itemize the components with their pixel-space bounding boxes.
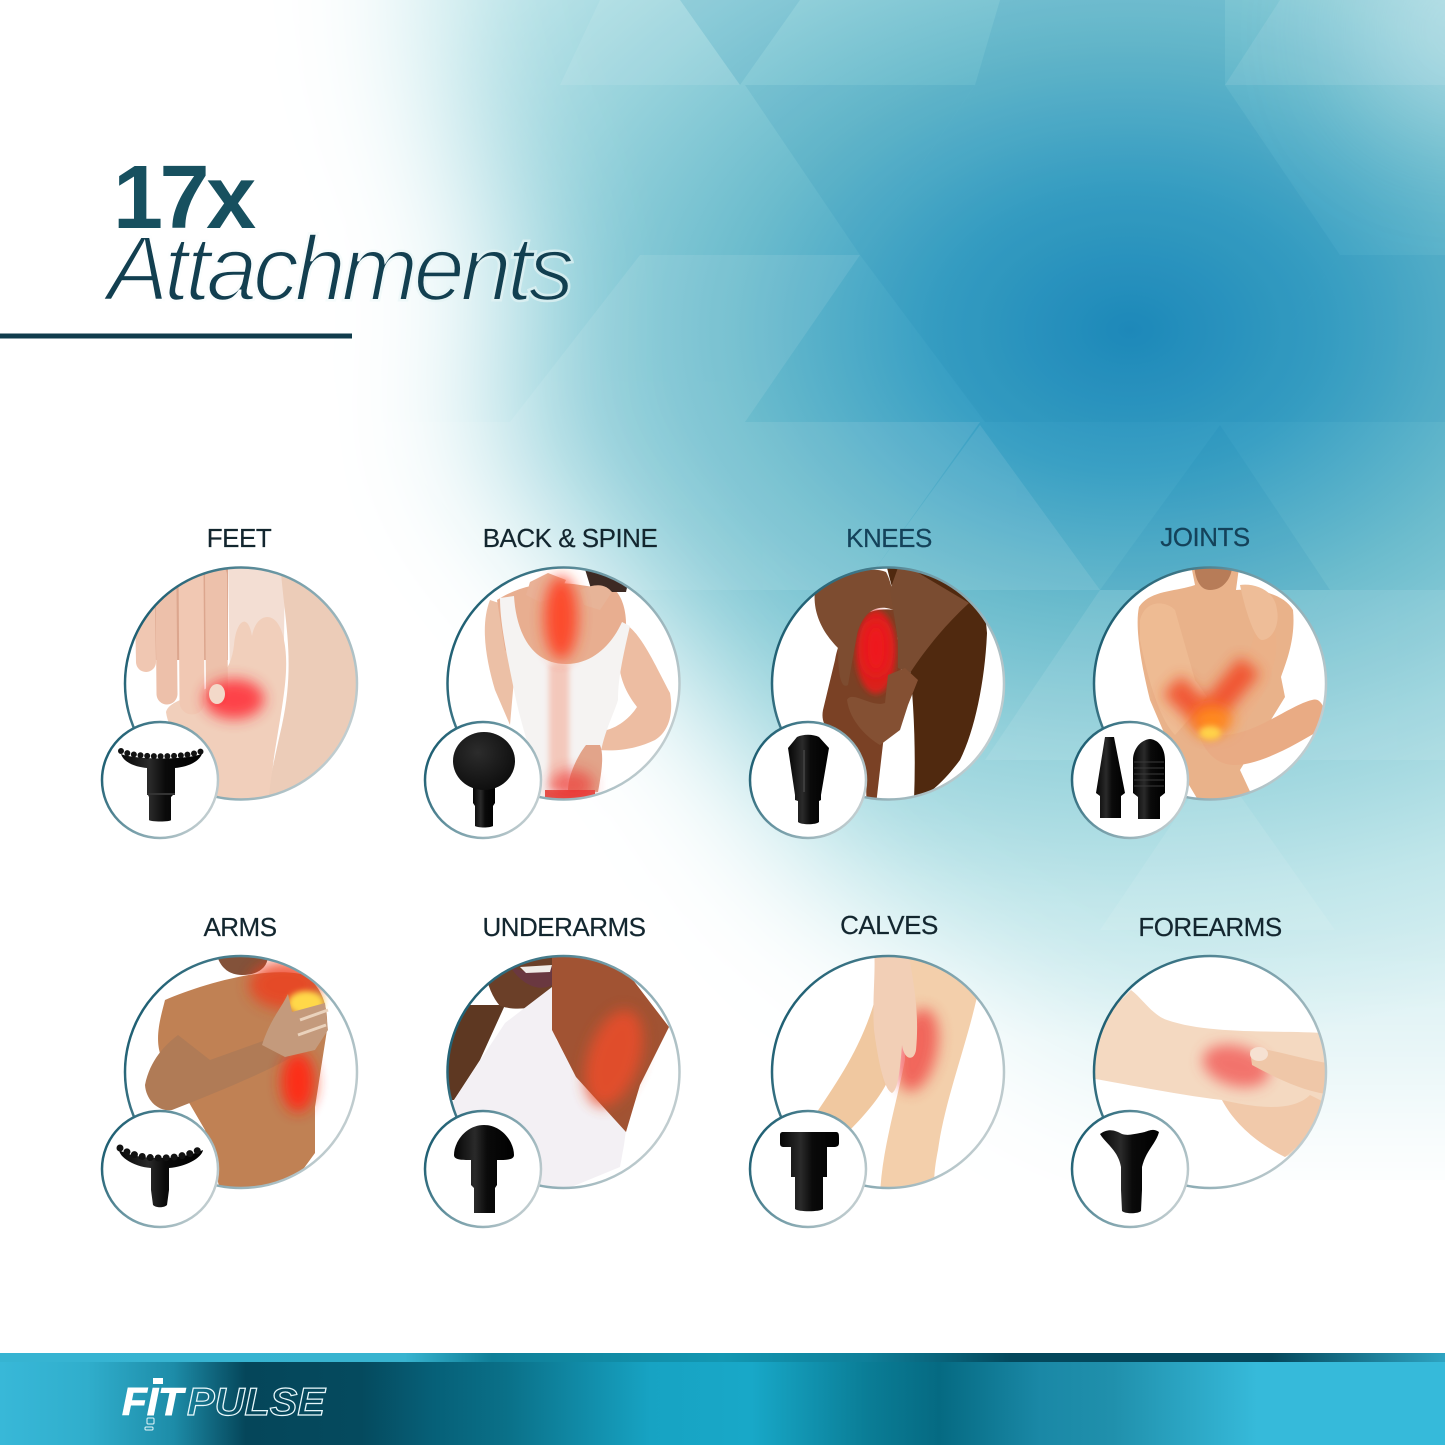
- panel: feet: [102, 523, 365, 838]
- icon: Y comb attachment: [102, 1111, 218, 1227]
- icon: ball attachment: [425, 722, 541, 838]
- footer band: [0, 1353, 1445, 1445]
- photo: calf: [818, 957, 1002, 1187]
- label: calves: CALVES: [840, 910, 938, 940]
- title: Attachments: Attachments: [102, 218, 573, 320]
- label: arms: ARMS: [203, 912, 277, 942]
- label: joints: JOINTS: [1160, 522, 1250, 552]
- panel: underarms: [425, 912, 680, 1227]
- icon: flat attachment: [750, 1111, 866, 1227]
- ring: [125, 568, 357, 800]
- icon: fan attachment: [1072, 1111, 1188, 1227]
- ring: [772, 956, 1004, 1188]
- photo: arm: [145, 957, 329, 1187]
- photo: knee: [772, 560, 1004, 805]
- label: knees: KNEES: [846, 523, 932, 553]
- panel: knees: [750, 523, 1004, 838]
- logo: FitPulse: FIT: [122, 1381, 186, 1424]
- label: feet: FEET: [207, 523, 272, 553]
- ring: [1094, 568, 1326, 800]
- panel: forearms: [1072, 912, 1340, 1227]
- ring: [448, 956, 680, 1188]
- label: forearms: FOREARMS: [1138, 912, 1282, 942]
- panel: arms: [102, 912, 357, 1227]
- photo: forearm: [1095, 957, 1325, 1157]
- title: 17x: 17x: [113, 148, 256, 248]
- ring: [772, 568, 1004, 800]
- icon: dome attachment: [425, 1111, 541, 1227]
- icon: bullet attachment: [750, 722, 866, 838]
- icon: cone and ribbed attachments: [1072, 722, 1188, 838]
- panel: calves: [750, 910, 1004, 1227]
- ring: [448, 568, 680, 800]
- icon: comb attachment: [102, 722, 218, 838]
- ring: [1094, 956, 1326, 1188]
- logo: FitPulse: PULSE: [187, 1381, 326, 1424]
- panel: back & spine: [425, 523, 680, 838]
- title underline: [0, 334, 352, 338]
- ring: [125, 956, 357, 1188]
- photo: torso with arm: [1094, 560, 1326, 800]
- photo: back: [484, 568, 678, 798]
- label: underarms: UNDERARMS: [482, 912, 646, 942]
- panel: joints: [1072, 522, 1326, 838]
- label: back & spine: BACK & SPINE: [483, 523, 657, 553]
- photo: foot: [136, 568, 356, 798]
- photo: underarm: [448, 957, 669, 1186]
- logo: FitPulse: [122, 1378, 326, 1430]
